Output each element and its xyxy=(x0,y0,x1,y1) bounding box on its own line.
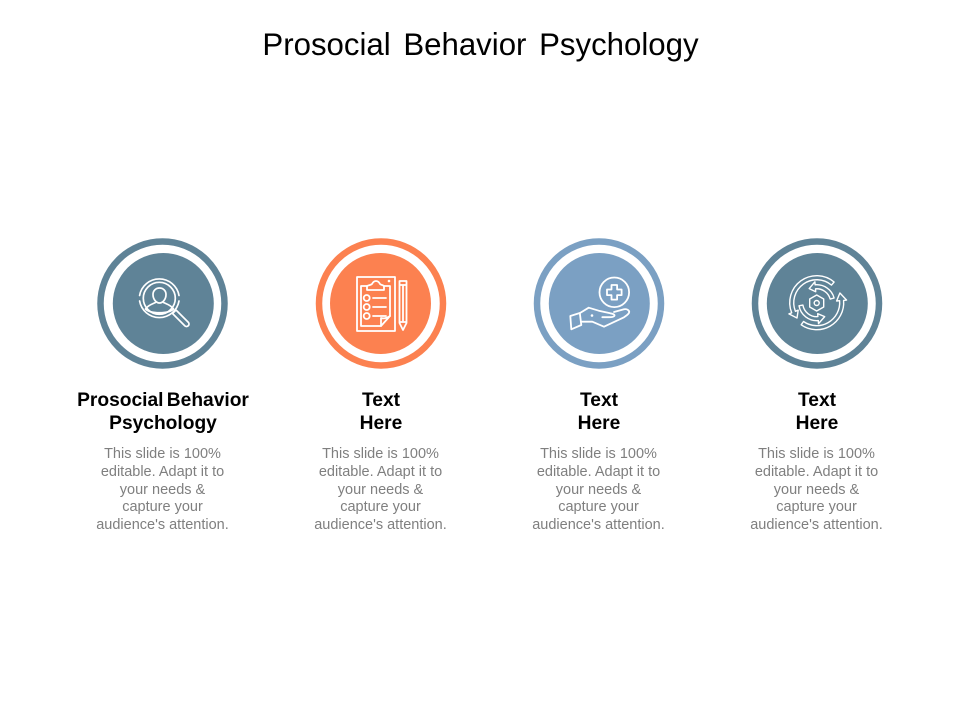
column 2 heading: Text xyxy=(362,390,400,410)
column 2 text: This slide is 100% xyxy=(322,446,439,462)
column 1 text: This slide is 100% xyxy=(104,446,221,462)
column 3 text: audience's attention. xyxy=(532,517,665,533)
column 1 text: audience's attention. xyxy=(96,517,229,533)
icon: magnifier over person in slate circle xyxy=(100,242,224,366)
column 4 heading xyxy=(796,390,838,434)
column 4 text: This slide is 100% xyxy=(758,446,875,462)
column 1 text: editable. Adapt it to xyxy=(101,464,224,480)
column 1 text: your needs & xyxy=(120,482,205,498)
column 4 text: editable. Adapt it to xyxy=(755,464,878,480)
icon: hand holding medical cross in blue circle xyxy=(537,242,661,366)
column 3 heading: Text xyxy=(580,390,618,410)
column 4 text xyxy=(750,446,883,533)
column 2 text: editable. Adapt it to xyxy=(319,464,442,480)
column 2 text: your needs & xyxy=(338,482,423,498)
column 1 heading: Psychology xyxy=(109,412,217,434)
column 2 text xyxy=(314,446,447,533)
column 3 text: capture your xyxy=(558,499,639,515)
column 2 text: capture your xyxy=(340,499,421,515)
column 4 text: capture your xyxy=(776,499,857,515)
column 2 heading xyxy=(360,390,402,434)
column 3 heading: Here xyxy=(578,412,620,434)
icon: clipboard and pencil in orange circle xyxy=(319,242,443,366)
column 4 heading: Here xyxy=(796,412,838,434)
column 3 text: editable. Adapt it to xyxy=(537,464,660,480)
title: Prosocial Behavior Psychology xyxy=(262,27,699,62)
icon: circular arrows around gear in slate circle xyxy=(755,242,879,366)
column 1 text xyxy=(96,446,229,533)
column 2 text: audience's attention. xyxy=(314,517,447,533)
column 3 heading xyxy=(578,390,620,434)
column 4 text: your needs & xyxy=(774,482,859,498)
column 3 text: This slide is 100% xyxy=(540,446,657,462)
column 4 heading: Text xyxy=(798,390,836,410)
column 3 text: your needs & xyxy=(556,482,641,498)
column 1 heading: Prosocial Behavior xyxy=(77,390,249,410)
column 1 heading xyxy=(77,390,249,434)
column 2 heading: Here xyxy=(360,412,402,434)
column 3 text xyxy=(532,446,665,533)
column 4 text: audience's attention. xyxy=(750,517,883,533)
column 1 text: capture your xyxy=(122,499,203,515)
